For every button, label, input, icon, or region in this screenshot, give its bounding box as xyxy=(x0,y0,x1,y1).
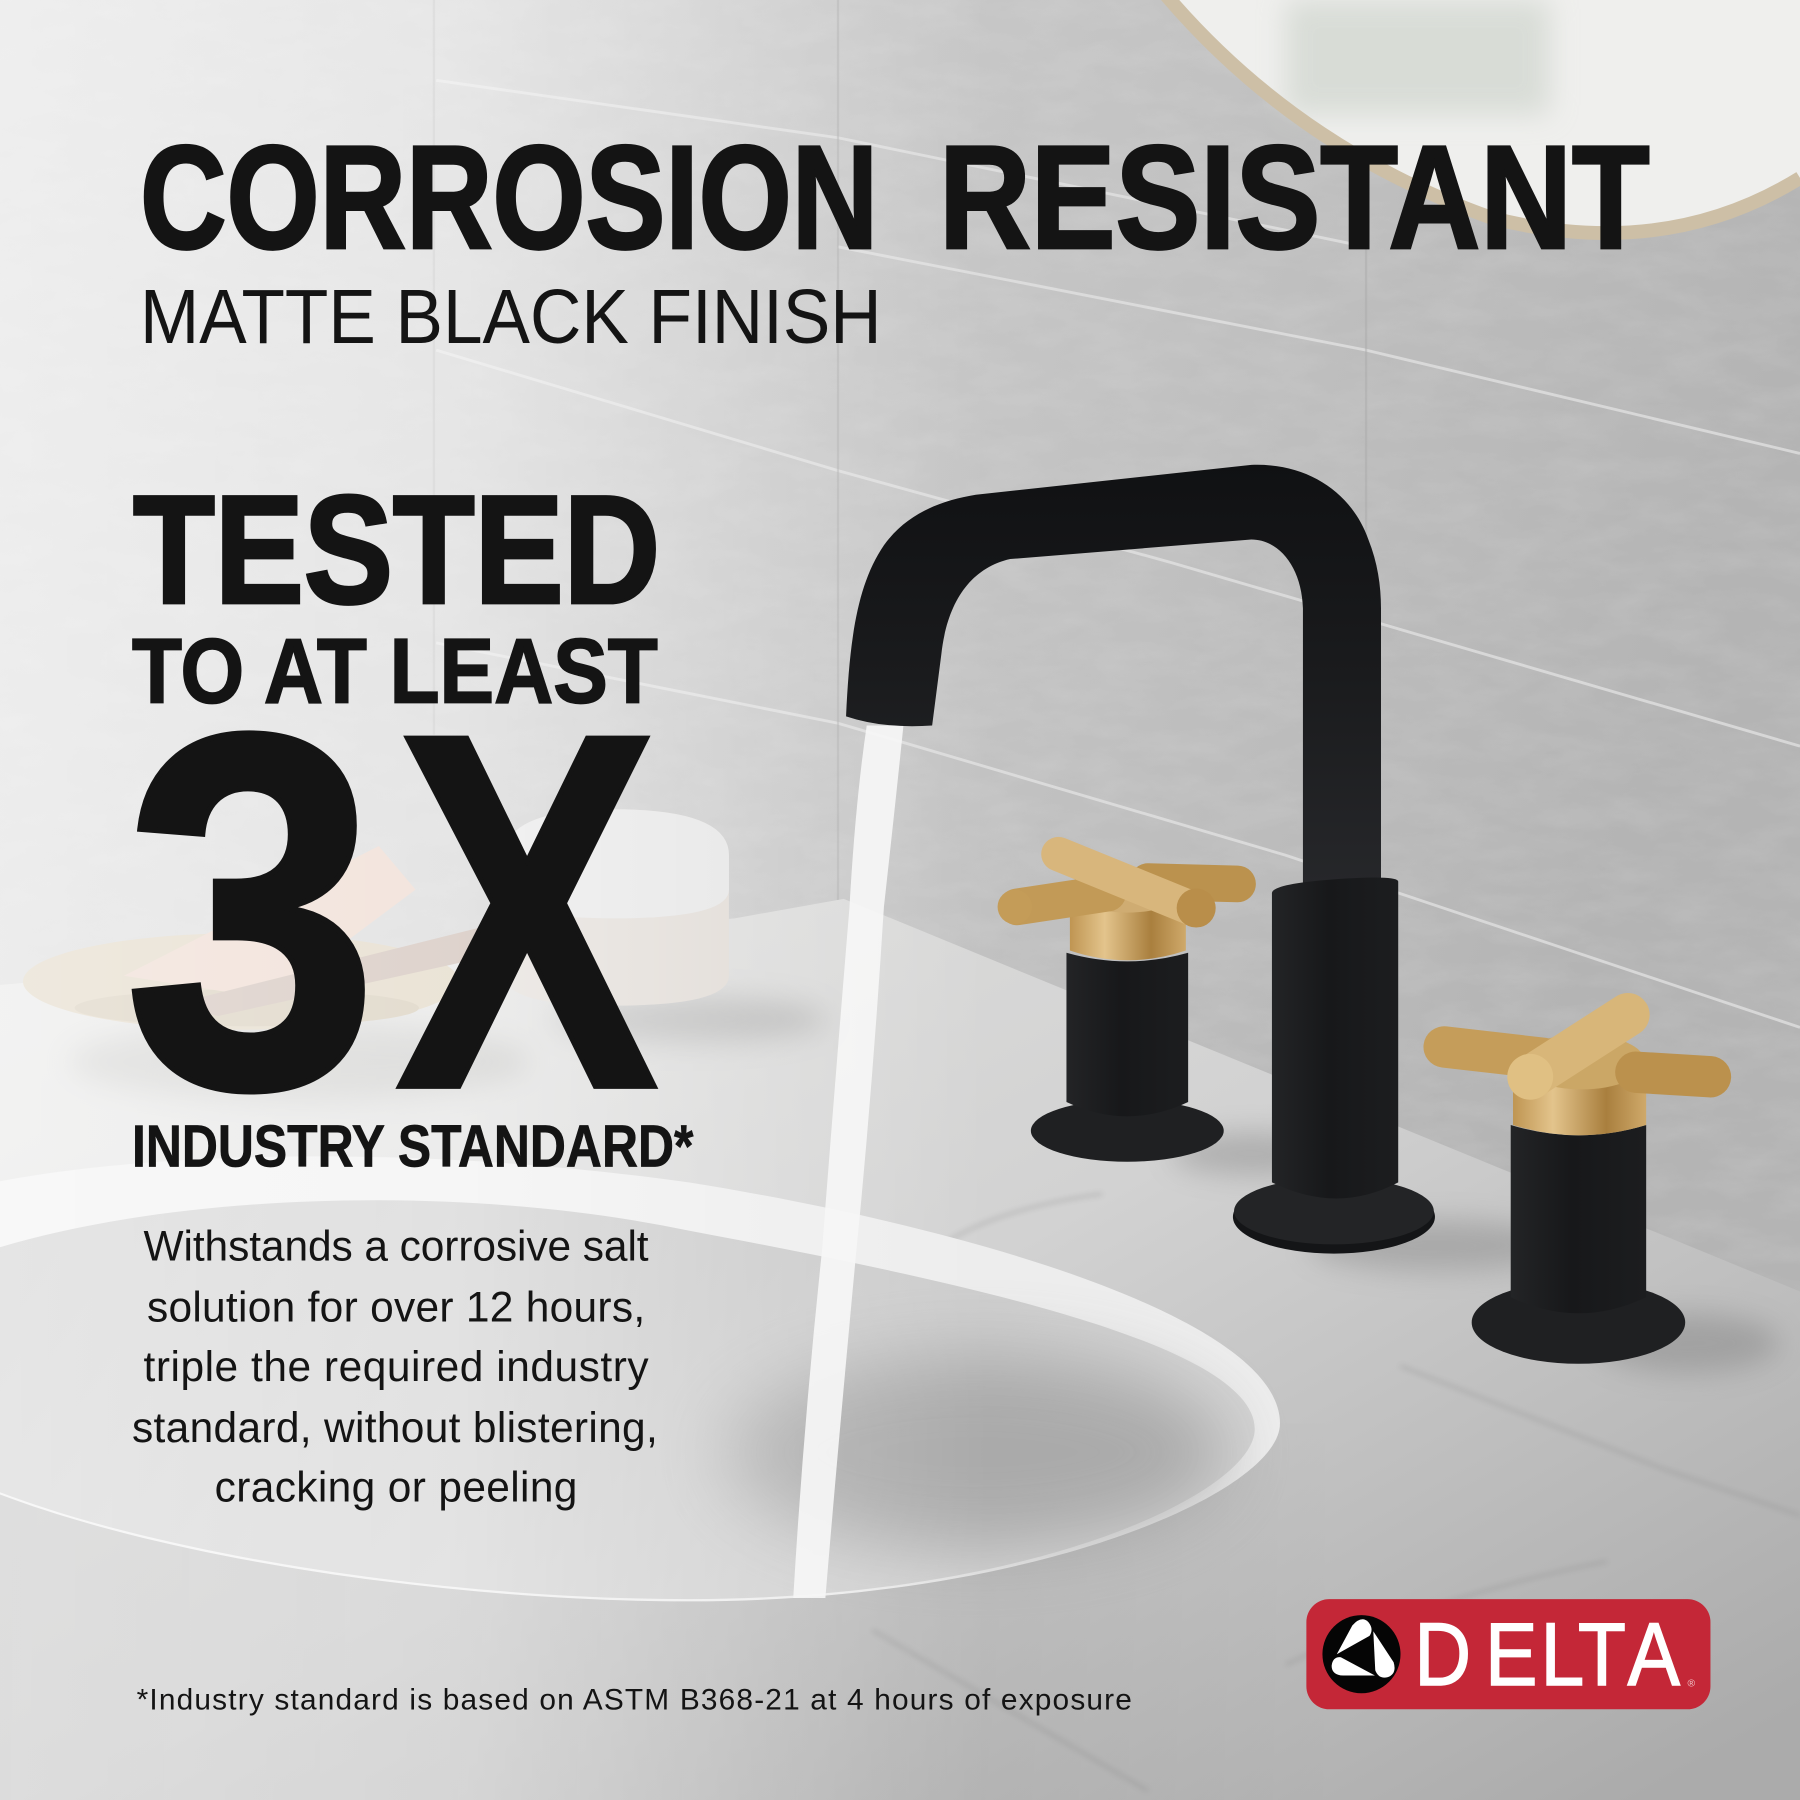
claim: to at least: TO AT LEAST xyxy=(132,621,658,723)
body text xyxy=(132,1222,658,1511)
body text: solution for over 12 hours, xyxy=(147,1283,645,1330)
claim: 3X xyxy=(124,630,660,1194)
subtitle: MATTE BLACK FINISH xyxy=(140,274,882,360)
left handle xyxy=(998,854,1238,1162)
Delta logo xyxy=(1306,1599,1710,1709)
title: CORROSION xyxy=(140,116,878,280)
water stream xyxy=(793,726,903,1598)
claim: 3X: X xyxy=(396,630,660,1194)
claim: industry standard: INDUSTRY STANDARD* xyxy=(132,1112,694,1179)
vanity items: dish, tube, jar xyxy=(23,809,827,1101)
body text: cracking or peeling xyxy=(215,1464,577,1511)
right handle xyxy=(1444,1015,1710,1364)
claim: 3X: 3 xyxy=(124,630,379,1194)
sink xyxy=(0,1156,1280,1601)
faucet spout xyxy=(846,465,1381,886)
registered mark: ® xyxy=(1688,1678,1696,1689)
body text: standard, without blistering, xyxy=(132,1404,658,1451)
title xyxy=(140,116,1650,280)
icon: Delta triangle mark xyxy=(1322,1615,1401,1693)
faucet body xyxy=(1233,878,1435,1254)
title: RESISTANT xyxy=(939,116,1650,280)
lower shading over the counter front, following the sink edge xyxy=(0,1423,1800,1800)
body text: Withstands a corrosive salt xyxy=(143,1222,649,1269)
counter shadows behind faucet xyxy=(1171,1133,1779,1373)
marble counter xyxy=(0,899,1800,1800)
claim: tested: TESTED xyxy=(133,464,660,636)
footnote: *Industry standard is based on ASTM B368-21 at 4 hours of exposure xyxy=(137,1683,1132,1716)
mirror xyxy=(1165,0,1800,233)
wordmark: DELTA xyxy=(1414,1605,1681,1704)
wall tiles xyxy=(0,0,1800,1378)
claim block xyxy=(124,464,694,1194)
body text: triple the required industry xyxy=(143,1343,649,1390)
